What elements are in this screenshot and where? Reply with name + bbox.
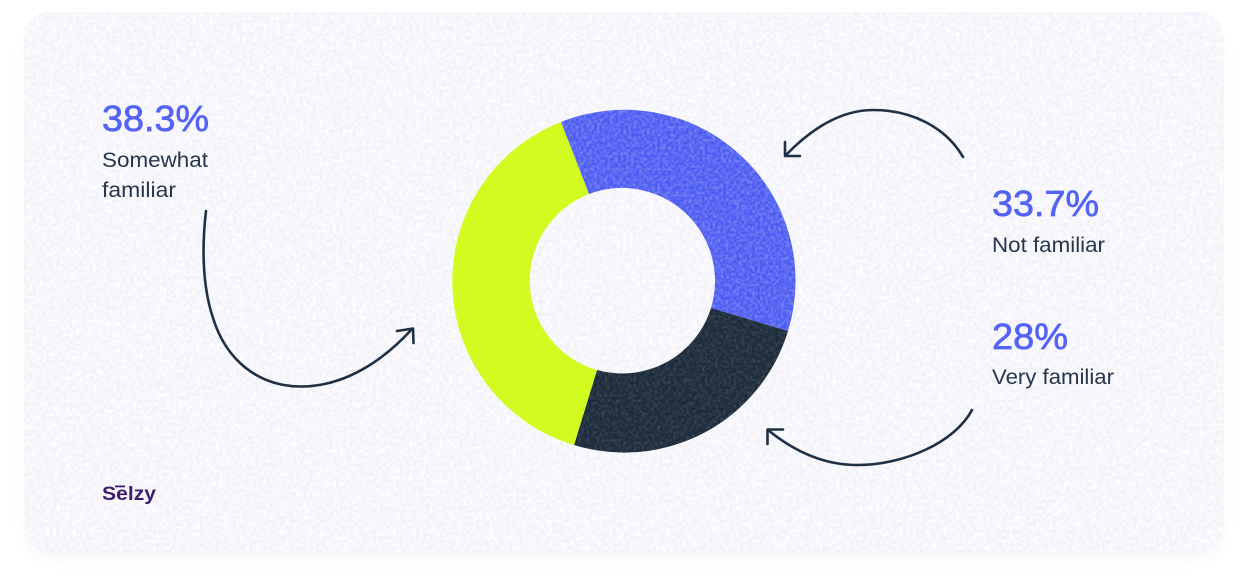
label: very familiar bbox=[992, 316, 1114, 389]
value 28%: 28% bbox=[992, 316, 1068, 357]
logo macron bar bbox=[115, 486, 125, 487]
arrow: very familiar to donut bbox=[768, 410, 972, 465]
donut chart bbox=[452, 110, 796, 453]
segment: very familiar bbox=[574, 308, 788, 453]
caption line 1: Somewhat bbox=[102, 149, 208, 172]
arrow: somewhat familiar to donut bbox=[204, 211, 414, 387]
label: not familiar bbox=[992, 183, 1105, 257]
segment: somewhat familiar bbox=[452, 122, 597, 445]
segment: not familiar bbox=[561, 110, 796, 331]
logo wordmark: Selzy bbox=[102, 484, 156, 505]
logo: Selzy bbox=[102, 484, 156, 505]
value 38.3%: 38.3% bbox=[102, 98, 209, 139]
caption: Very familiar bbox=[992, 366, 1114, 389]
caption line 2: familiar bbox=[102, 179, 176, 202]
caption: Not familiar bbox=[992, 234, 1105, 257]
label: somewhat familiar bbox=[102, 98, 209, 202]
arrow: not familiar to donut bbox=[785, 110, 963, 157]
value 33.7%: 33.7% bbox=[992, 183, 1099, 224]
